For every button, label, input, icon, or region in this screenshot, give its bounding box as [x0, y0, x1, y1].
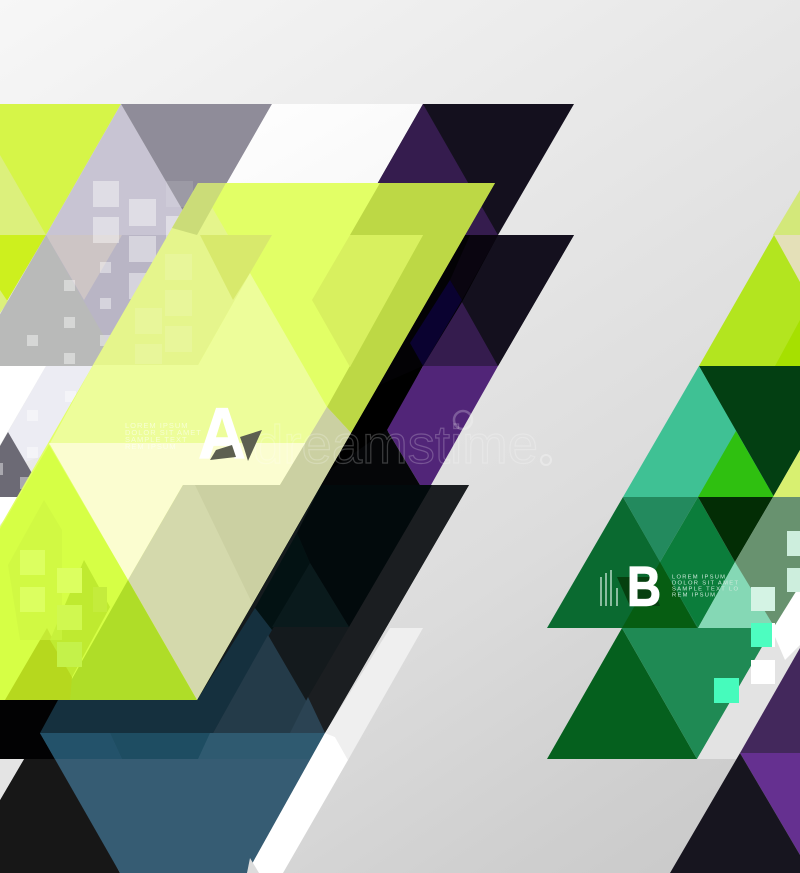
panel: translucent lime card A: [0, 183, 495, 700]
panel: top-left triangle mosaic: [0, 104, 423, 525]
decorative squares: lime triangle: [8, 500, 107, 667]
panel: dark lower band: [0, 485, 469, 873]
text block: lorem ipsum faint: SAMPLE TEXT: [125, 435, 188, 444]
label B: [601, 554, 738, 618]
icon: dark arrow: [210, 430, 262, 461]
text block: lorem ipsum faint: LOREM IPSUM: [125, 421, 189, 430]
text block: lorem ipsum: LOREM IPSUM: [672, 574, 725, 580]
label A: [125, 394, 262, 474]
panel: white stripe: [247, 628, 423, 873]
icon: vertical bars: [601, 570, 617, 606]
text block: lorem ipsum faint: DOLOR SIT AMET: [125, 428, 202, 437]
panel: dark purple triangles: [300, 104, 574, 560]
text block: lorem ipsum: REM IPSUM: [672, 592, 715, 598]
shadow behind B: [617, 577, 660, 606]
text block: lorem ipsum faint: REM IPSUM: [125, 442, 177, 451]
letter A: A: [198, 394, 246, 474]
decorative squares: faint under card: [135, 254, 192, 364]
panel: blue triangles: [40, 608, 325, 873]
text block: lorem ipsum: [672, 574, 738, 598]
panel: green triangle group B: [547, 366, 800, 759]
decorative squares: grey zone: [0, 181, 193, 489]
decorative squares: mint: [714, 531, 800, 703]
text block: lorem ipsum faint: [125, 421, 202, 451]
text block: lorem ipsum: DOLOR SIT AMET: [672, 580, 738, 586]
text block: lorem ipsum: SAMPLE TEXT LO: [672, 586, 738, 592]
panel: right lime triangles: [699, 190, 800, 366]
letter B: B: [627, 554, 661, 618]
panel: white and purple corner: [670, 585, 800, 873]
watermark: dreamstime: [253, 415, 538, 475]
